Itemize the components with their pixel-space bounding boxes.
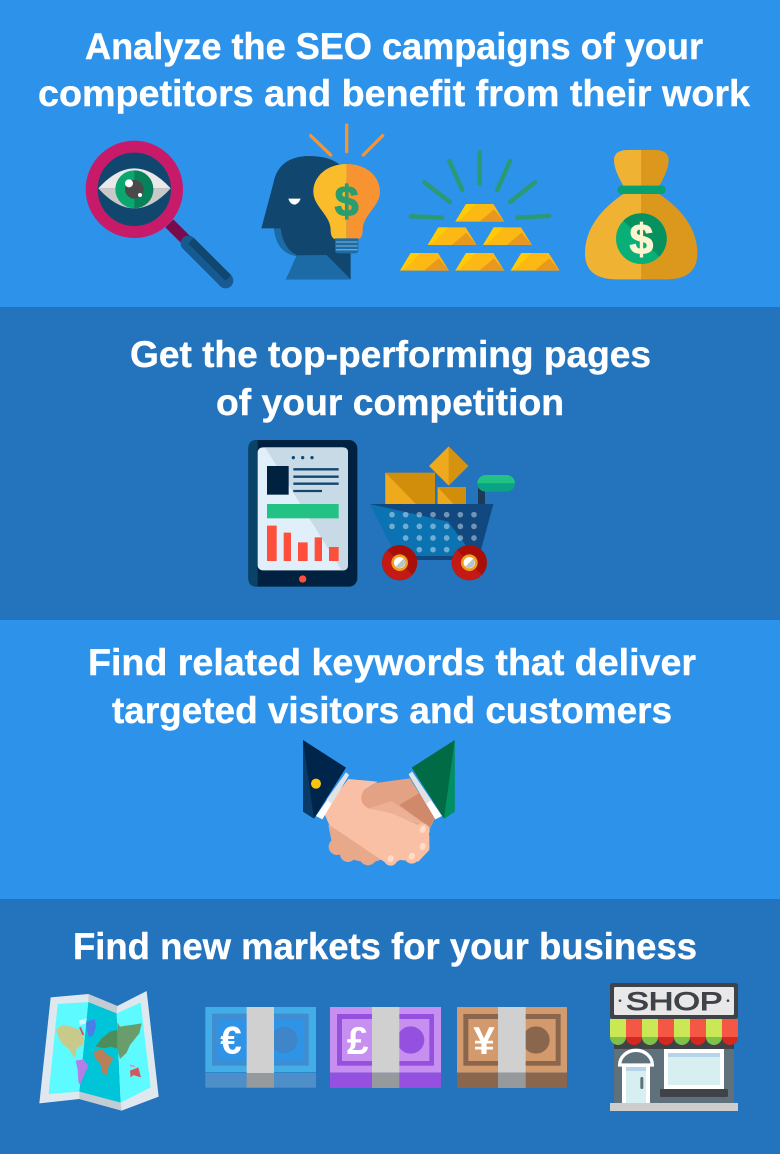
icon: world map	[39, 991, 159, 1111]
icon: shopping cart with boxes	[370, 446, 515, 580]
icon: handshake	[303, 740, 455, 866]
icon: pound banknote: £	[347, 1020, 369, 1063]
icon: money bag: $	[629, 216, 653, 264]
heading: analyze	[38, 26, 750, 114]
icon: euro banknote: €	[220, 1019, 242, 1062]
panel: analyze competitors	[0, 0, 780, 307]
heading: markets: Find new markets for your business	[73, 926, 697, 967]
icon: yen banknote	[457, 1007, 567, 1088]
icon: gold bars	[400, 152, 560, 271]
icon: yen banknote: ¥	[473, 1020, 495, 1063]
icon: shop storefront: SHOP	[626, 988, 723, 1016]
panel: related keywords	[0, 620, 780, 899]
heading: keywords: Find related keywords that deliver	[88, 642, 696, 683]
heading: top pages	[130, 334, 651, 423]
heading: top pages: of your competition	[216, 382, 564, 423]
icon: money bag	[585, 150, 697, 279]
icon: euro banknote	[205, 1007, 316, 1088]
panel: top-performing pages	[0, 307, 780, 620]
icon: tablet with report	[248, 440, 357, 587]
heading: analyze: Analyze the SEO campaigns of your	[85, 26, 703, 67]
heading: keywords	[88, 642, 696, 731]
icon: head with dollar light bulb: $	[335, 178, 359, 226]
heading: keywords: targeted visitors and customers	[112, 690, 672, 731]
icon: head with dollar light bulb	[261, 125, 383, 279]
heading: top pages: Get the top-performing pages	[130, 334, 651, 375]
icon: shop storefront	[610, 983, 738, 1111]
icon: pound banknote	[330, 1007, 441, 1088]
panel: new markets	[0, 899, 780, 1154]
icon: magnifying glass with eye	[92, 147, 228, 281]
heading: analyze: competitors and benefit from their work	[38, 73, 750, 114]
